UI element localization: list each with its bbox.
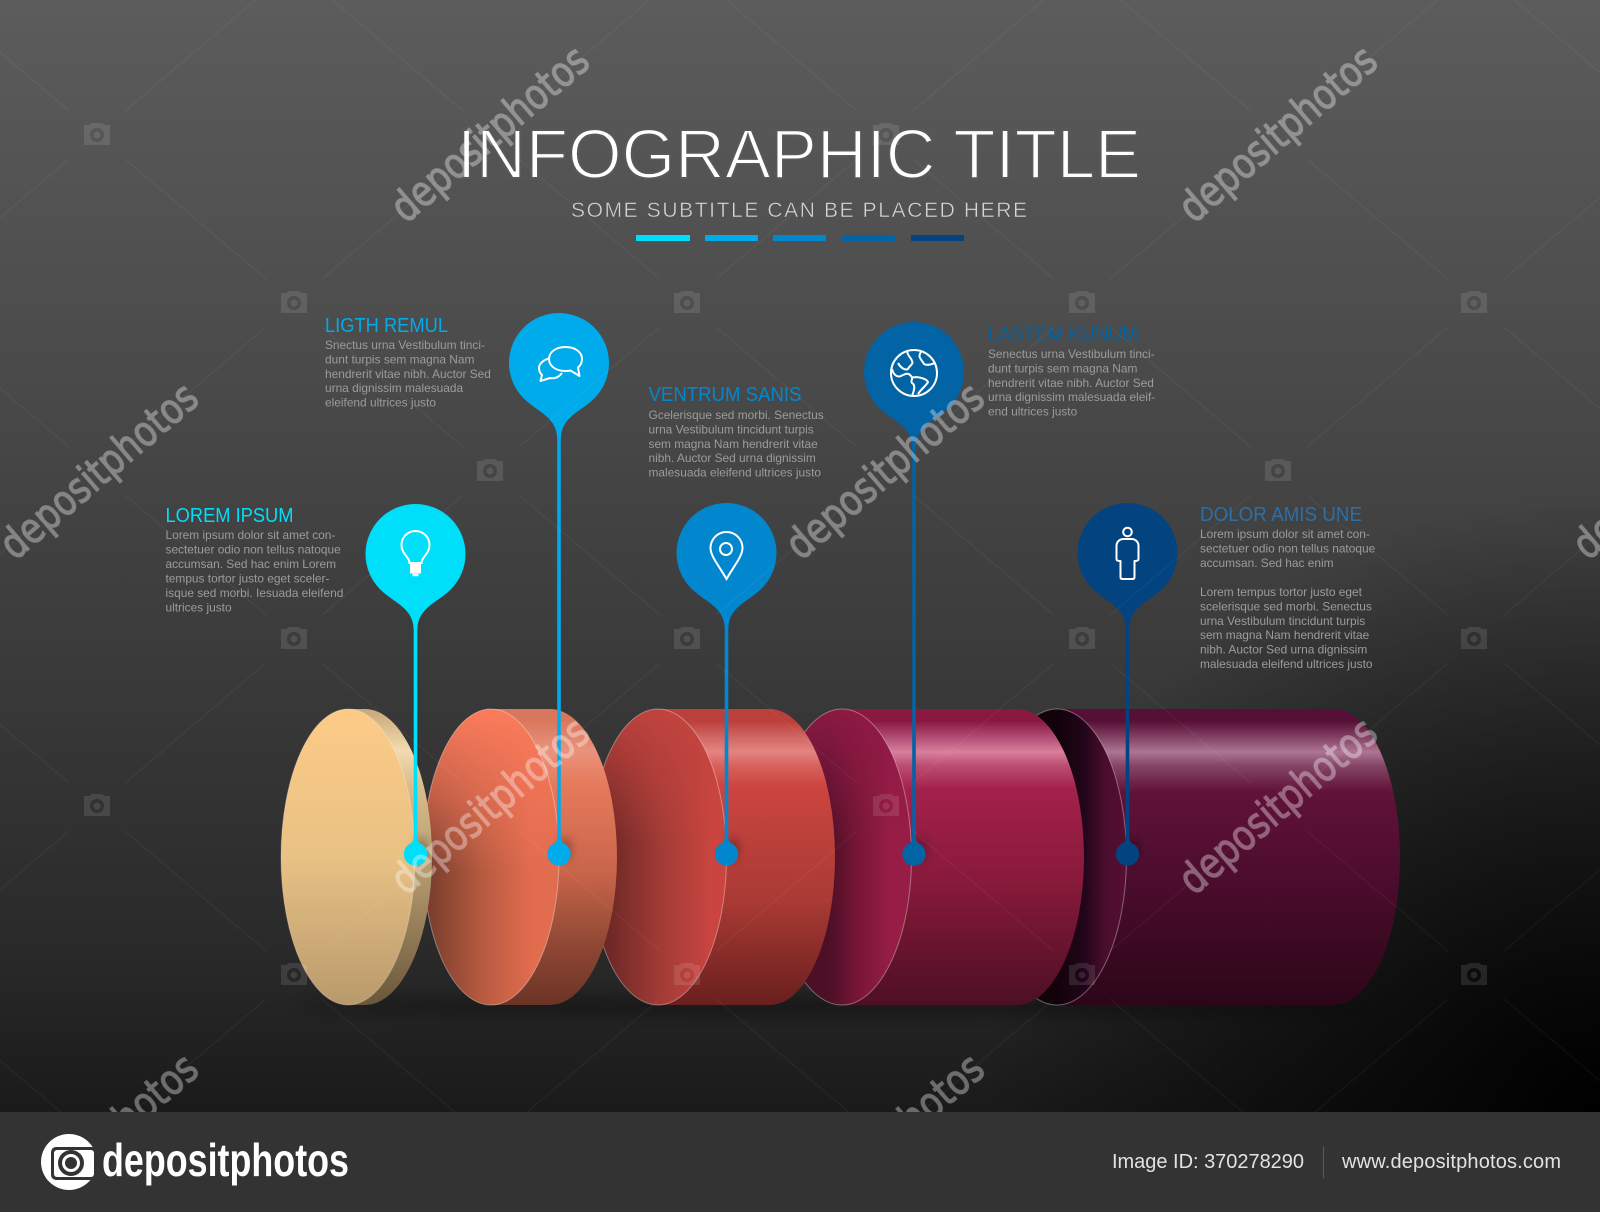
text block: lorem ipsum: tempus tortor justo eget sceler-	[166, 572, 329, 586]
footer logo wordmark: depositphotos	[102, 1134, 349, 1186]
pin 2: chat bubbles	[509, 313, 609, 866]
watermark text: depositphotos	[381, 707, 599, 904]
text block: lastem kunum	[988, 324, 1159, 419]
pin 5: person	[1078, 503, 1178, 866]
text block: lorem ipsum	[166, 505, 347, 614]
text block: dolor amis une: accumsan. Sed hac enim	[1200, 556, 1334, 570]
footer bar	[0, 1112, 1600, 1212]
text block: lastem kunum: hendrerit vitae nibh. Auctor Sed	[988, 376, 1154, 390]
text block: lorem ipsum: ultrices justo	[166, 600, 232, 614]
segment 2: coral	[423, 709, 617, 1005]
title colour dashes	[636, 235, 964, 241]
text block: dolor amis une: DOLOR AMIS UNE	[1200, 504, 1362, 526]
text block: ligth remul: LIGTH REMUL	[325, 315, 448, 337]
text block: ligth remul: urna dignissim malesuada	[325, 381, 464, 395]
text block: lastem kunum: end ultrices justo	[988, 405, 1078, 419]
text block: ligth remul: eleifend ultrices justo	[325, 396, 436, 410]
text block: dolor amis une: Lorem tempus tortor justo eget	[1200, 585, 1363, 599]
text block: dolor amis une: urna Vestibulum tincidunt turpis	[1200, 614, 1365, 628]
text block: lorem ipsum: LOREM IPSUM	[166, 505, 294, 527]
text block: ventrum sanis: VENTRUM SANIS	[648, 384, 802, 406]
icon: globe	[891, 350, 937, 396]
text block: dolor amis une: sem magna Nam hendrerit vitae	[1200, 628, 1370, 642]
text block: ventrum sanis: nibh. Auctor Sed urna dignissim	[648, 451, 816, 465]
footer site url: www.depositphotos.com	[1341, 1151, 1561, 1173]
text block: lastem kunum: Senectus urna Vestibulum tinci-	[988, 347, 1155, 361]
text block: lorem ipsum: isque sed morbi. Iesuada eleifend	[166, 586, 343, 600]
watermark text: depositphotos	[1169, 707, 1387, 904]
text block: ligth remul: dunt turpis sem magna Nam	[325, 352, 474, 366]
footer image id: Image ID: 370278290	[1112, 1151, 1304, 1173]
watermark text: depositphotos	[381, 35, 599, 232]
icon: light bulb	[402, 531, 430, 575]
text block: dolor amis une: scelerisque sed morbi. Senectus	[1200, 599, 1372, 613]
text block: lorem ipsum: sectetuer odio non tellus natoque	[166, 542, 341, 556]
pin 3: location marker	[676, 503, 776, 866]
icon: location marker	[710, 532, 742, 579]
segment 5: plum	[988, 709, 1400, 1005]
text block: ligth remul	[325, 315, 494, 410]
cylinder chart	[281, 709, 1400, 1005]
text block: dolor amis une: nibh. Auctor Sed urna dignissim	[1200, 643, 1367, 657]
cylinder ground shadow	[290, 998, 1370, 1014]
icon: chat bubbles	[539, 347, 582, 381]
text block: dolor amis une: sectetuer odio non tellus natoque	[1200, 541, 1376, 555]
segment 3: red	[590, 709, 835, 1005]
footer logo mark	[41, 1134, 97, 1190]
text block: lastem kunum: LASTEM KUNUM	[988, 324, 1138, 346]
icon: person	[1116, 528, 1138, 579]
text block: ventrum sanis: urna Vestibulum tincidunt turpis	[648, 422, 814, 436]
segment 4: crimson	[772, 709, 1084, 1005]
text block: dolor amis une: malesuada eleifend ultrices justo	[1200, 657, 1373, 671]
text block: dolor amis une	[1200, 504, 1378, 671]
text block: lastem kunum: dunt turpis sem magna Nam	[988, 361, 1137, 375]
text block: ventrum sanis	[648, 384, 827, 480]
text block: ventrum sanis: sem magna Nam hendrerit vitae	[648, 437, 818, 451]
text block: ligth remul: hendrerit vitae nibh. Auctor Sed	[325, 367, 491, 381]
pin 1: light bulb	[366, 504, 466, 866]
segment 1: sand	[281, 709, 432, 1005]
text block: lorem ipsum: Lorem ipsum dolor sit amet con-	[166, 528, 335, 542]
watermark text: depositphotos	[776, 372, 994, 569]
text block: ventrum sanis: Gcelerisque sed morbi. Senectus	[648, 408, 824, 422]
watermark text: depositphotos	[1169, 35, 1387, 232]
text block: ligth remul: Snectus urna Vestibulum tinci-	[325, 338, 485, 352]
text block: lastem kunum: urna dignissim malesuada eleif-	[988, 390, 1155, 404]
text block: dolor amis une: Lorem ipsum dolor sit amet con-	[1200, 527, 1370, 541]
pin 4: globe	[864, 322, 964, 866]
subtitle: SOME SUBTITLE CAN BE PLACED HERE	[571, 199, 1027, 222]
text block: ventrum sanis: malesuada eleifend ultrices justo	[648, 466, 821, 480]
title: INFOGRAPHIC TITLE	[457, 115, 1141, 193]
text block: lorem ipsum: accumsan. Sed hac enim Lorem	[166, 557, 336, 571]
